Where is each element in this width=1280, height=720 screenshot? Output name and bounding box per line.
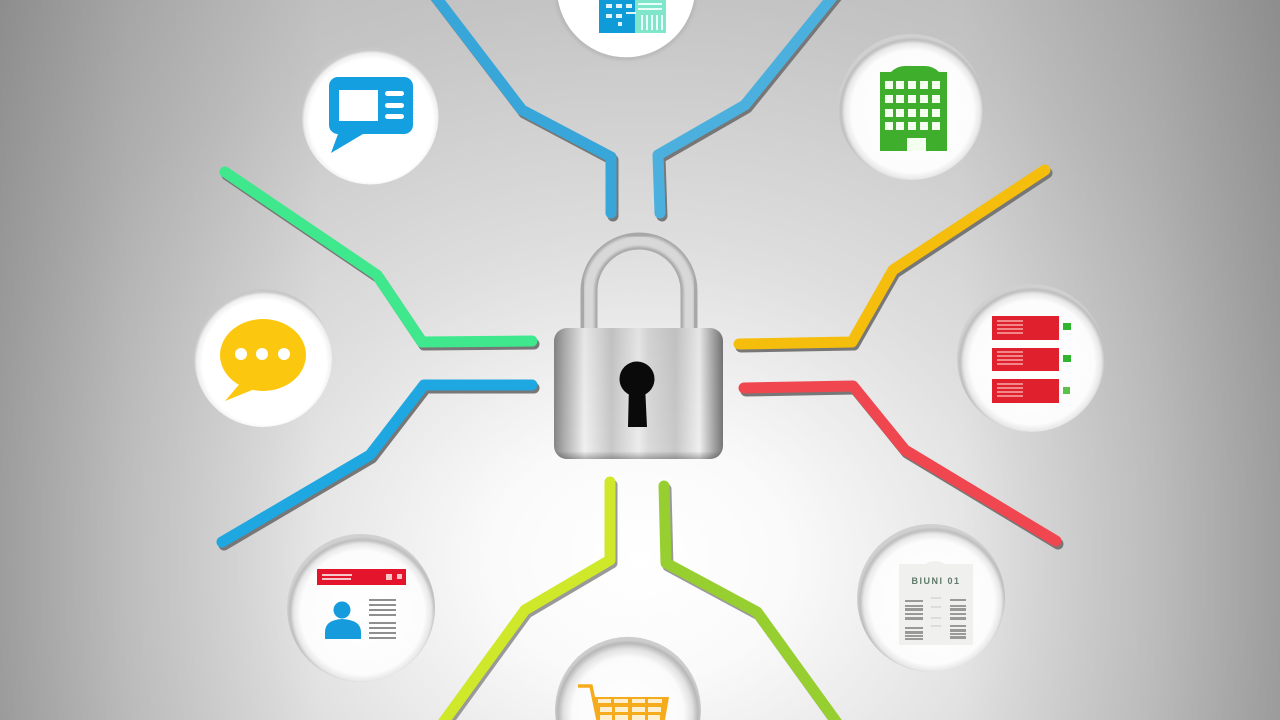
icon: three red cards with green marks — [992, 316, 1071, 403]
connector lines: bottom lime — [438, 482, 612, 720]
connector lines: left green — [225, 172, 534, 345]
padlock body — [554, 328, 723, 459]
icon: blue speech bubble with card — [329, 77, 413, 153]
icon disc: shopping cart — [555, 637, 701, 720]
icon: blue and mint buildings — [599, 0, 666, 33]
icon disc: green office building — [838, 34, 984, 180]
receipt heading: BIUNI 01 — [911, 576, 961, 586]
padlock shackle — [589, 241, 689, 330]
icon: yellow speech bubble — [220, 319, 306, 401]
icon disc: yellow chat — [194, 289, 332, 427]
icon disc: red document list — [957, 284, 1105, 432]
icon: profile page with red header — [317, 569, 406, 639]
icon disc: barcode receipt — [857, 524, 1005, 672]
connector lines: right yellow — [739, 170, 1047, 347]
icon disc: top buildings — [555, 0, 697, 60]
icon: pale receipt with barcodes — [899, 561, 973, 645]
connector lines: top right blue — [658, 0, 841, 216]
connector lines: left blue — [222, 385, 534, 545]
icon: orange shopping cart — [578, 686, 669, 720]
padlock — [554, 241, 723, 459]
padlock keyhole — [620, 362, 654, 427]
connector lines: right red — [744, 386, 1058, 544]
icon disc: profile page — [287, 534, 435, 682]
icon disc: speech card — [302, 48, 438, 184]
connector lines: bottom green — [664, 486, 842, 720]
icon: green office building — [880, 66, 947, 151]
connector lines: top left blue — [431, 0, 613, 216]
